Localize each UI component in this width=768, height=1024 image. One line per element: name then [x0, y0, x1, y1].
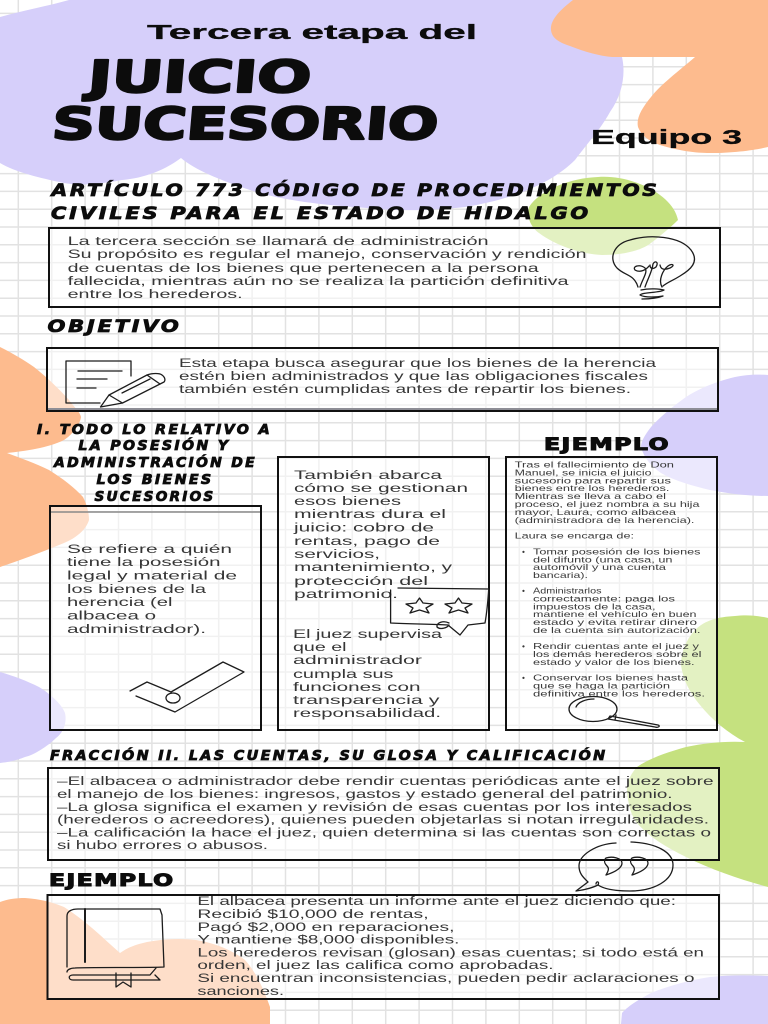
- icon: check mark: [130, 662, 244, 712]
- text block: ejemplo narrativa: proceso, el juez nombra a su hija: [515, 499, 700, 509]
- text block: posesion: [67, 542, 237, 636]
- text block: supervision: [293, 627, 442, 720]
- heading: fraccion I: SUCESORIOS: [94, 489, 216, 505]
- bullet list: tareas de laura: de la cuenta sin autorización.: [533, 625, 700, 635]
- text block: ejemplo narrativa: Mientras se lleva a cabo el: [515, 491, 666, 501]
- bullet list: tareas de laura: •: [522, 546, 525, 556]
- text block: ejemplo narrativa: sucesorio para repartir sus: [515, 476, 671, 486]
- text block: supervision: responsabilidad.: [293, 706, 441, 720]
- text block: supervision: El juez supervisa: [293, 627, 442, 641]
- text block: informe: sanciones.: [197, 984, 284, 998]
- text block: proposito: fallecida, mientras aún no se realiza la partición definitiva: [68, 274, 569, 288]
- text block: gestion: cómo se gestionan: [294, 481, 468, 495]
- icon: speech bubble with stars: [391, 588, 489, 635]
- text block: posesion: Se refiere a quién: [67, 542, 232, 556]
- text block: posesion: los bienes de la: [67, 582, 206, 596]
- bullet list: tareas de laura: del difunto (una casa, un: [533, 554, 673, 564]
- text block: proposito: Su propósito es regular el manejo, conservación y rendición: [68, 247, 587, 261]
- icon: magnifying glass: [569, 696, 659, 727]
- heading: articulo 773: CIVILES PARA EL ESTADO DE HIDALGO: [51, 204, 591, 223]
- text block: ejemplo narrativa: Tras el fallecimiento de Don: [515, 460, 675, 470]
- panel: objetivo: [47, 348, 718, 411]
- text block: informe: Y mantiene $8,000 disponibles.: [197, 932, 459, 946]
- bullet list: tareas de laura: Conservar los bienes hasta: [533, 672, 689, 682]
- text block: gestion: patrimonio.: [294, 587, 398, 601]
- heading: objetivo: OBJETIVO: [48, 317, 182, 337]
- bullet list: tareas de laura: Administrarlos: [533, 586, 602, 596]
- text block: gestion: esos bienes: [294, 494, 401, 508]
- text block: informe: Recibió $10,000 de rentas,: [197, 907, 429, 921]
- panel: posesion: [50, 506, 261, 730]
- text block: objetivo: estén bien administrados y que las obligaciones fiscales: [179, 369, 648, 383]
- heading: ejemplo bottom: EJEMPLO: [49, 871, 174, 890]
- heading: fraccion I: I. TODO LO RELATIVO A: [37, 422, 272, 438]
- text block: proposito: entre los herederos.: [68, 287, 243, 301]
- text block: proposito: de cuentas de los bienes que pertenecen a la persona: [68, 261, 539, 275]
- text block: proposito: La tercera sección se llamará de administración: [68, 234, 489, 248]
- heading: articulo 773: [49, 181, 659, 223]
- icon: document and pencil: [66, 361, 165, 407]
- bullet list: tareas de laura: •: [522, 641, 525, 651]
- text block: supervision: administrador: [293, 653, 422, 667]
- text block: cuentas: –La glosa significa el examen y revisión de esas cuentas por los interesados: [57, 800, 692, 814]
- bullet list: tareas de laura: estado y evita retirar dinero: [533, 617, 698, 627]
- bullet list: tareas de laura: que se haga la partición: [533, 680, 671, 690]
- text block: supervision: cumpla sus: [293, 667, 394, 681]
- text block: supervision: funciones con: [293, 680, 421, 694]
- panel: administracion: [49, 228, 720, 307]
- text block: objetivo: Esta etapa busca asegurar que los bienes de la herencia: [179, 356, 656, 370]
- panel: cuentas glosa calificacion: [48, 768, 719, 860]
- heading: articulo 773: ARTÍCULO 773 CÓDIGO DE PROCEDIMIENTOS: [49, 181, 659, 200]
- text block: posesion: albacea o: [67, 608, 156, 622]
- text block: posesion: administrador).: [67, 622, 206, 636]
- text block: cuentas: el manejo de los bienes: ingresos, gastos y estado general del patrimonio.: [57, 787, 672, 801]
- bullet list: tareas de laura: •: [522, 672, 525, 682]
- text block: gestion: También abarca: [294, 468, 442, 482]
- bullet list: tareas de laura: mantiene el vehículo en buen: [533, 609, 697, 619]
- title: tercera etapa del: Tercera etapa del: [147, 22, 477, 44]
- icon: book: [67, 909, 164, 987]
- text block: cuentas: –El albacea o administrador debe rendir cuentas periódicas ante el juez sobre: [57, 774, 714, 788]
- text block: gestion: servicios,: [294, 547, 380, 561]
- text block: ejemplo narrativa: [515, 460, 700, 540]
- bullet list: tareas de laura: los demás herederos sobre el: [533, 649, 702, 659]
- text block: informe: Pagó $2,000 en reparaciones,: [197, 920, 454, 934]
- title: juicio sucesorio: [50, 52, 440, 150]
- text block: posesion: legal y material de: [67, 568, 237, 582]
- text block: cuentas: (herederos o acreedores), quienes pueden objetarlas si notan irregularidades.: [57, 812, 709, 826]
- heading: fraccion I: ADMINISTRACIÓN DE: [53, 453, 257, 471]
- panel: ejemplo informe: [48, 894, 719, 999]
- icon: quote speech bubble: [576, 842, 673, 891]
- text block: objetivo: [179, 356, 656, 396]
- text block: posesion: herencia (el: [67, 595, 172, 609]
- text block: gestion: juicio: cobro de: [292, 520, 434, 534]
- text block: informe: [197, 894, 704, 998]
- bullet list: tareas de laura: definitiva entre los herederos.: [533, 688, 705, 698]
- panel: ejemplo herencia: [506, 457, 717, 730]
- text block: informe: Los herederos revisan (glosan) esas cuentas; si todo está en: [197, 946, 704, 960]
- text block: supervision: transparencia y: [293, 693, 441, 707]
- title: juicio sucesorio: JUICIO: [82, 52, 313, 103]
- text block: ejemplo narrativa: Laura se encarga de:: [515, 530, 634, 540]
- text block: gestion: protección del: [294, 574, 428, 588]
- text block: cuentas: [57, 774, 714, 852]
- text block: cuentas: si hubo errores o abusos.: [57, 838, 268, 852]
- bullet list: tareas de laura: •: [522, 586, 525, 596]
- heading: fraccion II: FRACCIÓN II. LAS CUENTAS, SU GLOSA Y CALIFICACIÓN: [50, 746, 608, 764]
- bullet list: tareas de laura: automóvil y una cuenta: [533, 562, 667, 572]
- heading: fraccion I: LOS BIENES: [96, 472, 214, 488]
- title: juicio sucesorio: SUCESORIO: [50, 99, 440, 150]
- bullet list: tareas de laura: Rendir cuentas ante el juez y: [533, 641, 700, 651]
- text block: informe: Si encuentran inconsistencias, pueden pedir aclaraciones o: [197, 971, 695, 985]
- text block: gestion: mientras dura el: [294, 507, 446, 521]
- bullet list: tareas de laura: Tomar posesión de los bienes: [533, 546, 700, 556]
- text block: gestion: rentas, pago de: [294, 534, 440, 548]
- text block: ejemplo narrativa: mayor, Laura, como albacea: [515, 507, 677, 517]
- bullet list: tareas de laura: impuestos de la casa,: [533, 602, 656, 612]
- panel: gestion: [278, 457, 489, 730]
- heading: ejemplo right column: EJEMPLO: [544, 435, 670, 454]
- text block: ejemplo narrativa: bienes entre los herederos.: [515, 483, 670, 493]
- text block: informe: orden, el juez las califica como aprobadas.: [197, 958, 554, 972]
- text block: ejemplo narrativa: (administradora de la herencia).: [515, 515, 694, 525]
- icon: light bulb: [613, 237, 695, 299]
- text block: gestion: [292, 468, 468, 601]
- bullet list: tareas de laura: correctamente: paga los: [533, 594, 675, 604]
- text block: gestion: mantenimiento, y: [294, 560, 453, 574]
- heading: fraccion I: LA POSESIÓN Y: [78, 436, 230, 454]
- text block: supervision: que el: [293, 640, 346, 654]
- bullet list: tareas de laura: bancaria).: [533, 570, 588, 580]
- text block: cuentas: –La calificación la hace el juez, quien determina si las cuentas son correctas o: [57, 826, 711, 840]
- bullet list: tareas de laura: [522, 546, 705, 698]
- text block: objetivo: también estén cumplidas antes de repartir los bienes.: [179, 382, 631, 396]
- text block: ejemplo narrativa: Manuel, se inicia el juicio: [515, 468, 652, 478]
- heading: fraccion I: [37, 422, 272, 505]
- text block: proposito: [68, 234, 587, 301]
- team label: Equipo 3: [591, 127, 742, 149]
- text block: posesion: tiene la posesión: [67, 555, 221, 569]
- bullet list: tareas de laura: estado y valor de los bienes.: [533, 657, 694, 667]
- text block: informe: El albacea presenta un informe ante el juez diciendo que:: [197, 894, 676, 908]
